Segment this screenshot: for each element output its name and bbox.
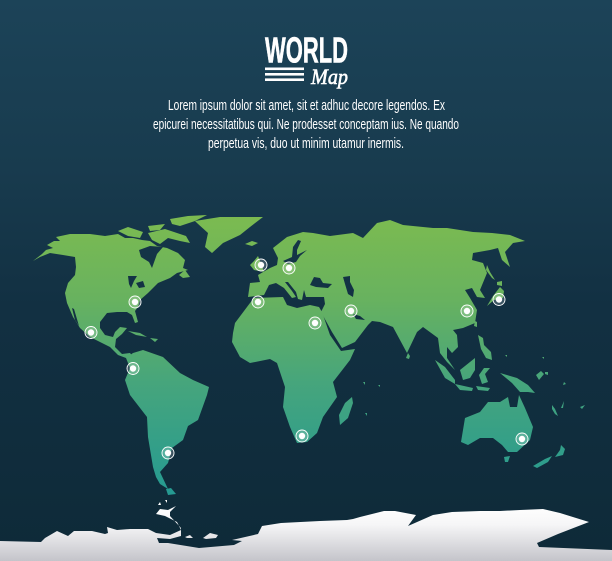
description text (153, 98, 459, 152)
Greenland (195, 217, 263, 253)
Antarctic islands (158, 500, 218, 539)
marker: USA (129, 296, 141, 308)
description text: epicurei necessitatibus qui. Ne prodesset conceptam ius. Ne quando (153, 117, 459, 133)
title: World: WORLD (265, 30, 348, 70)
marker: Morocco (252, 296, 264, 308)
islands: New Zealand (533, 445, 565, 468)
continent: Africa (232, 297, 355, 443)
marker: China (461, 305, 473, 317)
marker: Ecuador (127, 362, 139, 374)
Gulf of California (72, 308, 79, 326)
island: Great Britain (250, 256, 264, 272)
Great Lakes (128, 276, 145, 288)
title block (265, 30, 348, 89)
world map (33, 215, 585, 495)
continent: Eurasia (248, 220, 525, 370)
description text: Lorem ipsum dolor sit amet, sit et adhuc decore legendos. Ex (168, 98, 446, 114)
island: Tasmania (504, 456, 510, 462)
island: Newfoundland (179, 270, 190, 278)
Persian Gulf (353, 314, 365, 320)
title stripes (265, 68, 304, 81)
Caspian Sea (343, 276, 354, 297)
marker: Australia (516, 433, 528, 445)
Iceland (245, 241, 258, 246)
continent: North America (33, 234, 188, 358)
title: Map: Map (310, 64, 348, 89)
marker: Mexico (85, 326, 97, 338)
small Pacific islands (363, 355, 585, 416)
location markers (85, 259, 528, 459)
Black Sea (310, 277, 332, 288)
marker: Japan (493, 294, 505, 306)
marker: Eastern Europe (283, 262, 295, 274)
Antarctica (0, 506, 612, 561)
Arctic islands (118, 215, 207, 244)
islands: Southeast Asia (406, 321, 544, 393)
Hudson Bay (139, 246, 163, 268)
island: Madagascar (339, 397, 353, 425)
continent: South America (125, 350, 209, 489)
island: Tierra del Fuego (166, 488, 176, 495)
marker: South Africa (296, 430, 308, 442)
description text: perpetua vis, duo ut minim utamur inermis. (208, 136, 404, 152)
marker: UK (255, 259, 267, 271)
marker: Argentina (162, 447, 174, 459)
islands: Japan and Sakhalin (486, 265, 504, 306)
Baltic Sea (283, 240, 307, 264)
marker: Sudan (309, 317, 321, 329)
island: Cuba and Hispaniola (128, 331, 158, 342)
inland seas and lakes (72, 240, 365, 326)
continent: Australia (461, 395, 533, 452)
marker: Iran (345, 305, 357, 317)
